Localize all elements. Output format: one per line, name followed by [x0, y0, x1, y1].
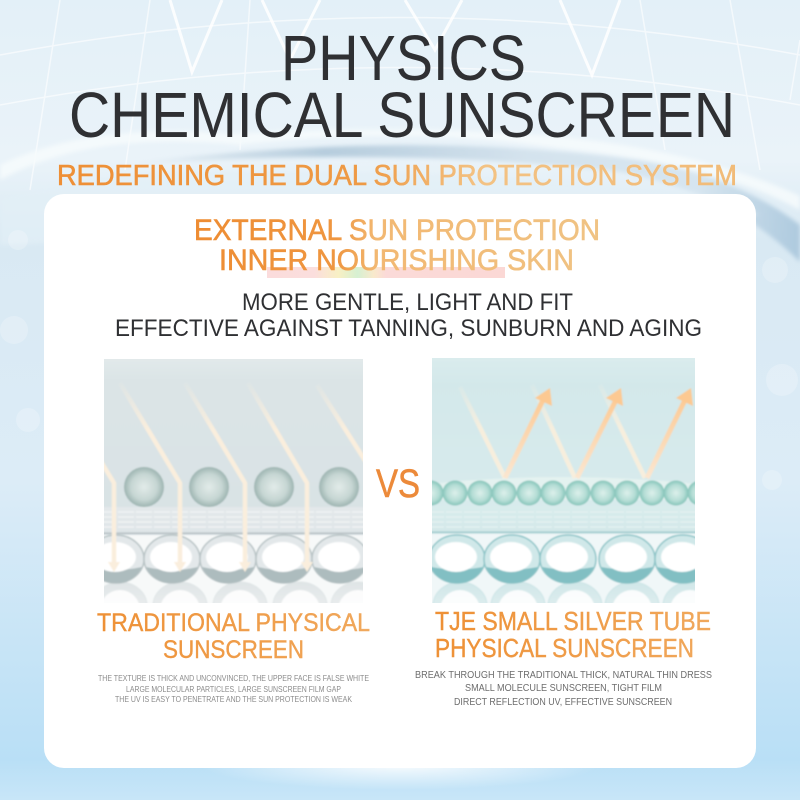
skin layer — [100, 507, 367, 534]
right column description: DIRECT REFLECTION UV, EFFECTIVE SUNSCREEN — [454, 697, 672, 708]
title: PHYSICS — [281, 22, 526, 94]
right column heading: TJE SMALL SILVER TUBE — [435, 608, 711, 636]
illustration: traditional physical sunscreen — [104, 359, 363, 603]
right column heading: PHYSICAL SUNSCREEN — [435, 635, 694, 663]
subtitle: REDEFINING THE DUAL SUN PROTECTION SYSTEM — [57, 160, 737, 192]
right column description: BREAK THROUGH THE TRADITIONAL THICK, NATURAL THIN DRESS — [415, 670, 712, 681]
card heading: INNER NOURISHING SKIN — [219, 244, 574, 277]
large sunscreen particles — [124, 467, 359, 507]
right column description: SMALL MOLECULE SUNSCREEN, TIGHT FILM — [465, 683, 662, 694]
left column description: LARGE MOLECULAR PARTICLES, LARGE SUNSCREEN FILM GAP — [126, 684, 341, 694]
incoming uv rays — [460, 385, 645, 478]
vs label: VS — [376, 462, 420, 506]
skin cells — [104, 534, 363, 603]
left column description: THE UV IS EASY TO PENETRATE AND THE SUN PROTECTION IS WEAK — [115, 694, 352, 704]
left column heading — [97, 609, 370, 664]
film dome — [440, 478, 690, 500]
small sunscreen particles — [418, 480, 712, 506]
right column description — [415, 670, 712, 708]
left column description: THE TEXTURE IS THICK AND UNCONVINCED, THE UPPER FACE IS FALSE WHITE — [98, 673, 369, 683]
uv rays penetrating — [100, 383, 366, 566]
left column heading: TRADITIONAL PHYSICAL — [97, 609, 370, 637]
rainbow highlight bar — [267, 267, 505, 278]
panel: main card — [44, 194, 756, 768]
right column heading — [435, 608, 711, 663]
card description — [115, 289, 702, 342]
title — [69, 22, 735, 151]
left column description — [98, 673, 369, 704]
reflected uv arrows — [505, 388, 693, 478]
card description: MORE GENTLE, LIGHT AND FIT — [242, 289, 573, 316]
illustration: small silver tube sunscreen — [432, 358, 695, 603]
card description: EFFECTIVE AGAINST TANNING, SUNBURN AND AGING — [115, 315, 702, 342]
card heading: EXTERNAL SUN PROTECTION — [194, 214, 600, 247]
skin cells — [432, 534, 695, 603]
title: CHEMICAL SUNSCREEN — [69, 79, 735, 151]
left column heading: SUNSCREEN — [163, 636, 304, 664]
card heading — [194, 214, 600, 277]
skin layer — [432, 530, 695, 534]
